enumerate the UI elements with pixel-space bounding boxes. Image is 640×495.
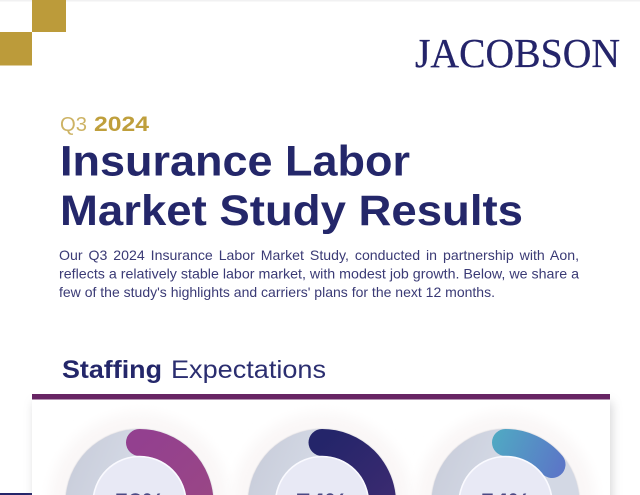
title: Market Study Results [60,188,523,235]
icon: gold corner squares [0,0,66,66]
donut chart: third metric [430,428,580,495]
intro paragraph [59,247,579,300]
donut chart: second metric [247,428,397,495]
panel: staffing card [32,394,612,495]
title: Insurance Labor [60,138,410,186]
purple top rule [32,394,610,400]
title [60,138,523,235]
donut chart: first metric [64,428,214,495]
eyebrow: Q3 2024: 2024 [94,112,149,136]
intro paragraph: Our Q3 2024 Insurance Labor Market Study, conducted in partnership with Aon, [59,247,579,263]
eyebrow: Q3 2024 [60,112,149,136]
logo: Jacobson: JACOBSON [415,30,620,76]
section heading: Staffing Expectations: Staffing [62,356,162,384]
intro paragraph: reflects a relatively stable labor market, with modest job growth. Below, we share a [59,266,579,282]
bottom-left navy bar [0,493,32,495]
top edge shadow [0,0,640,2]
section heading: Staffing Expectations [62,356,326,384]
eyebrow: Q3 2024: Q3 [60,113,87,136]
intro paragraph: few of the study's highlights and carriers' plans for the next 12 months. [59,284,495,300]
section heading: Staffing Expectations: Expectations [171,356,326,384]
